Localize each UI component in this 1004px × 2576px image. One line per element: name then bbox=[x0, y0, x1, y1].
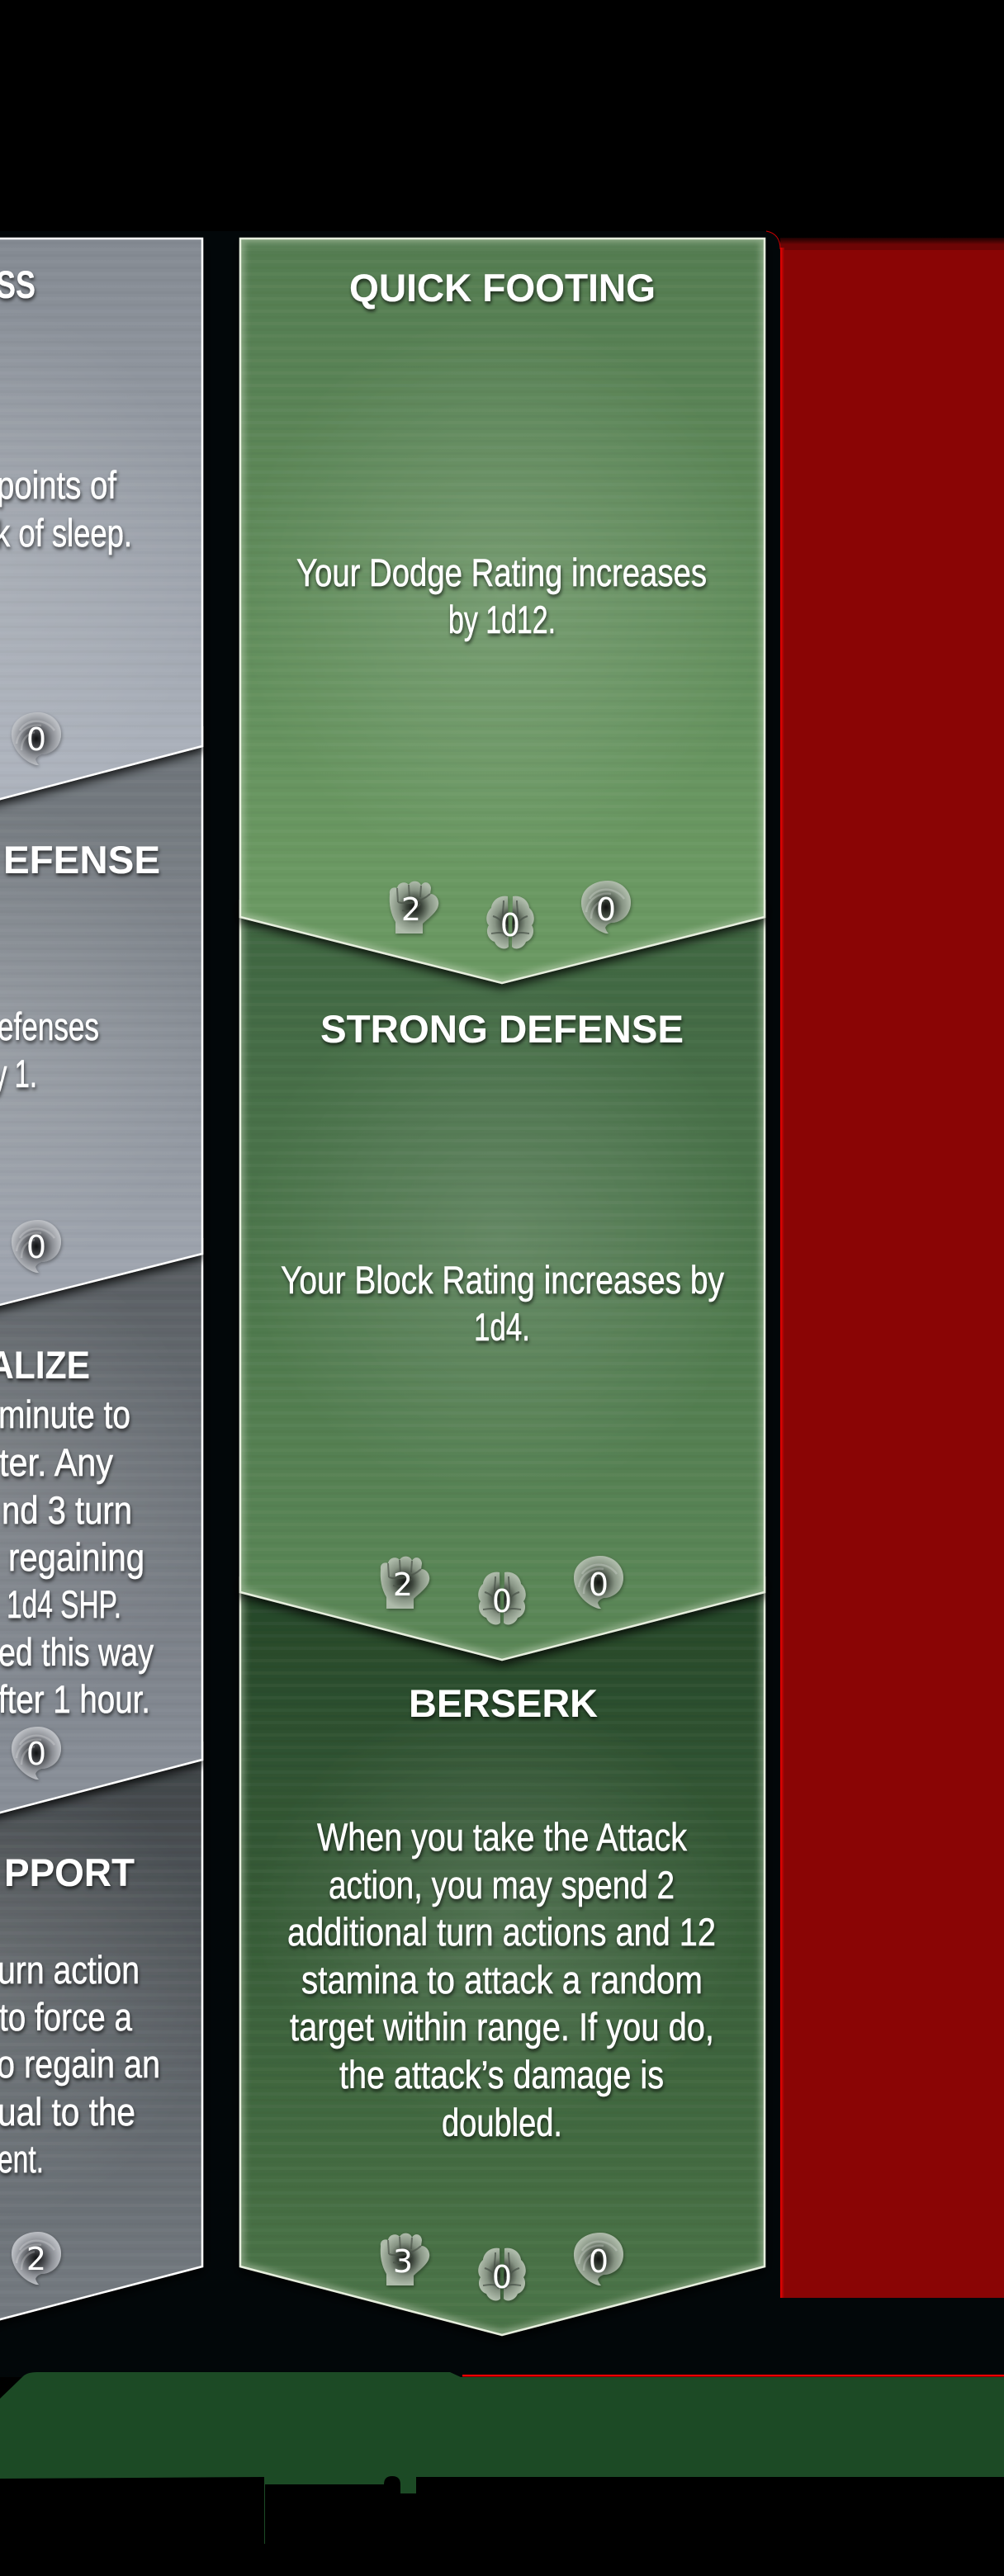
icon: fist: 2 bbox=[393, 1567, 413, 1603]
body: card 4: to force a bbox=[0, 1995, 133, 2039]
body text: When you take the Attack bbox=[317, 1815, 687, 1859]
body text: Your Block Rating increases by bbox=[281, 1258, 724, 1302]
icon: fist: 2 bbox=[401, 891, 421, 928]
icon: swirl: 0 bbox=[589, 2243, 609, 2280]
body: card 3: regaining bbox=[8, 1535, 144, 1579]
body: card 3: minute to bbox=[0, 1392, 130, 1436]
icon: fist: 3 bbox=[393, 2243, 413, 2280]
body: card 3 bbox=[0, 1392, 154, 1721]
green bottom band bbox=[0, 2372, 1004, 2544]
body: card 3: 1d4 SHP. bbox=[7, 1582, 121, 1626]
icon: brain: 0 bbox=[492, 2259, 512, 2295]
body text: Your Dodge Rating increases bbox=[296, 551, 707, 594]
panel: strong defense bbox=[240, 900, 765, 1663]
body: card 3: ter. Any bbox=[0, 1440, 113, 1484]
icon: swirl: 0 bbox=[596, 891, 616, 928]
heading: card 2: EFENSE bbox=[3, 838, 160, 882]
body: card 4: o regain an bbox=[0, 2042, 160, 2086]
panel: grey defense card bbox=[0, 726, 215, 1325]
body text: the attack’s damage is bbox=[339, 2053, 664, 2096]
body text: doubled. bbox=[442, 2101, 562, 2144]
body text: additional turn actions and 12 bbox=[287, 1910, 716, 1954]
body: card 2: efenses bbox=[0, 1004, 99, 1048]
body: card 4: urn action bbox=[0, 1948, 140, 1992]
icon: swirl card 3 bbox=[12, 1727, 61, 1780]
heading: card 4: PPORT bbox=[4, 1850, 135, 1894]
icon: swirl card 4 bbox=[12, 2232, 61, 2285]
icon: swirl bbox=[574, 2233, 623, 2285]
heading: QUICK FOOTING bbox=[349, 266, 656, 310]
body: card 3: ed this way bbox=[0, 1630, 154, 1674]
icon: swirl card 3: 0 bbox=[26, 1736, 46, 1772]
icon: brain bbox=[478, 1572, 526, 1624]
body text: action, you may spend 2 bbox=[329, 1863, 675, 1907]
body text bbox=[281, 1258, 724, 1349]
panel: grey restfulness card bbox=[0, 239, 215, 825]
body: card 1 bbox=[0, 463, 132, 555]
icon: brain: 0 bbox=[500, 907, 520, 943]
icon: fist bbox=[390, 882, 438, 934]
body: card 1: k of sleep. bbox=[0, 511, 132, 555]
heading: STRONG DEFENSE bbox=[320, 1007, 684, 1051]
icon: brain: 0 bbox=[492, 1583, 512, 1619]
icon: brain bbox=[486, 896, 534, 948]
body: card 3: fter 1 hour. bbox=[0, 1677, 150, 1721]
icon: swirl card 4: 2 bbox=[26, 2241, 46, 2277]
body: card 1: points of bbox=[0, 463, 117, 507]
panel: grey revitalize card bbox=[0, 1238, 215, 1832]
body text: by 1d12. bbox=[448, 598, 556, 641]
body text: 1d4. bbox=[474, 1305, 530, 1349]
icon: swirl card 1 bbox=[12, 712, 61, 765]
body: card 2 bbox=[0, 1004, 99, 1095]
icon: fist bbox=[381, 2233, 429, 2285]
panel: quick footing bbox=[238, 239, 766, 983]
icon: swirl bbox=[574, 1556, 623, 1609]
body: card 3: nd 3 turn bbox=[2, 1488, 132, 1532]
panel: grey support card bbox=[0, 1733, 215, 2340]
left column text bbox=[0, 262, 160, 2181]
icon: fist bbox=[381, 1557, 429, 1609]
icon: swirl bbox=[581, 881, 631, 934]
icon: swirl card 1: 0 bbox=[26, 721, 46, 758]
body: card 4 bbox=[0, 1948, 160, 2181]
body text bbox=[296, 551, 707, 641]
icon: swirl card 2: 0 bbox=[26, 1229, 46, 1265]
icon: swirl: 0 bbox=[589, 1567, 609, 1603]
panel: berserk bbox=[240, 1576, 765, 2336]
heading: BERSERK bbox=[409, 1681, 598, 1725]
body text: stamina to attack a random bbox=[301, 1958, 703, 2002]
red side panel bbox=[766, 231, 1004, 2298]
body text: target within range. If you do, bbox=[290, 2005, 714, 2049]
body: card 4: ual to the bbox=[0, 2090, 135, 2134]
icon: brain bbox=[478, 2248, 526, 2300]
icon: swirl card 2 bbox=[12, 1220, 61, 1273]
body text bbox=[287, 1815, 716, 2144]
